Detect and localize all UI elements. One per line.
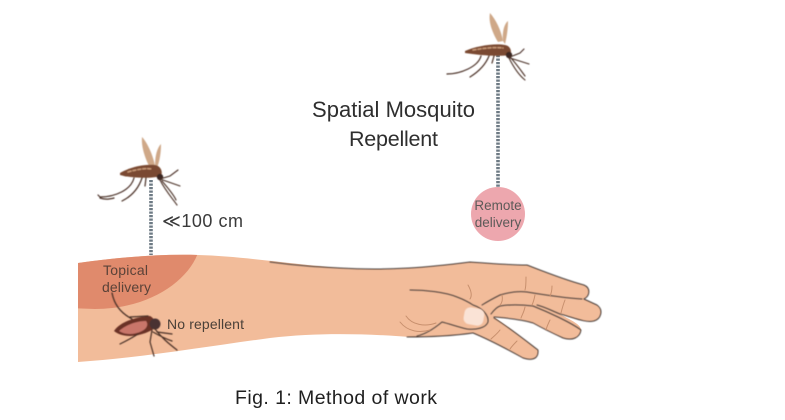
remote delivery label: Remote — [474, 198, 522, 213]
heading: spatial mosquito repellent: Repellent — [349, 127, 438, 151]
mosquito: top — [447, 13, 529, 80]
no repellent label: No repellent — [167, 316, 244, 332]
mosquito: near arm — [98, 137, 180, 205]
remote delivery circle — [471, 187, 525, 241]
dotted line: remote — [496, 55, 500, 188]
topical delivery label: Topical — [103, 262, 148, 278]
arm and hand — [70, 250, 601, 362]
caption: Fig. 1: Method of work — [235, 387, 437, 409]
topical delivery zone — [78, 254, 197, 309]
remote delivery circle: delivery — [475, 215, 522, 230]
heading: spatial mosquito repellent: Spatial Mosquito — [312, 97, 475, 122]
thumbnail — [463, 306, 485, 327]
topical delivery label — [102, 262, 151, 295]
mosquito: on arm — [112, 293, 177, 356]
topical delivery label: delivery — [102, 279, 151, 295]
hand outlines — [270, 262, 601, 359]
distance label: ≪100 cm — [162, 211, 243, 231]
dotted line: topical — [149, 180, 153, 255]
heading: spatial mosquito repellent — [312, 97, 475, 151]
